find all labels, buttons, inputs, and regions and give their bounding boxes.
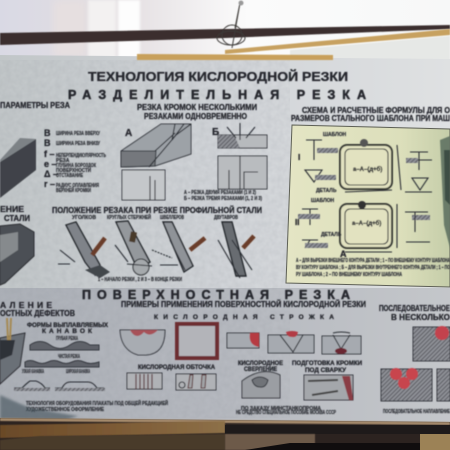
illustration: turning B: [176, 374, 216, 390]
caption: template formulas: РУ ШАБЛОНА ; 2 – ПО ВНЕШНЕМУ КОНТУРУ ШАБЛОНА: [296, 272, 402, 278]
panel: removal of surface defects: [0, 300, 168, 413]
template diagram I: [298, 132, 401, 194]
main title: ТЕХНОЛОГИЯ КИСЛОРОДНОЙ РЕЗКИ: [88, 69, 348, 84]
letter A: А: [340, 249, 347, 259]
illustration: narrow groove: УЗКАЯ КАНАВКА: [22, 369, 44, 375]
heading: fragment: ЕНИЕ: [0, 204, 24, 214]
heading: oxygen turning: КИСЛОРОДНАЯ ОБТОЧКА: [138, 364, 215, 371]
template diagram II: II: [295, 218, 299, 227]
panel: profile steel torch left: [0, 204, 34, 285]
template diagram I: ШАБЛОН: [323, 132, 347, 138]
panel: torch position for profile steel: [52, 204, 262, 283]
template diagram II: [295, 198, 397, 252]
panel: cut parameters: [0, 100, 106, 198]
background: window and wall: [0, 0, 450, 60]
parameter list: ШИРИНА РЕЗА ВНИЗУ: [56, 141, 101, 147]
parameter list: ГЛУБИНА БОРОЗДОК: [56, 163, 97, 169]
diagram B: Б: [212, 127, 219, 138]
panel: removal of surface defects: ОСТНЫХ ДЕФЕКТОВ: [0, 308, 75, 318]
labels: УГОЛКОВ: [72, 215, 96, 221]
poster sheet behind: [290, 36, 450, 60]
panel: surface cutting examples: НЕ СРЕДСТВО СПЕЦИАЛЬНОЕ ПОСОБИЕ МОСКВА СССР: [236, 410, 336, 416]
parameter list: f –: [44, 149, 55, 159]
panel: template scheme and formulas: [286, 105, 450, 287]
parameter list: [44, 128, 106, 194]
panel: removal of surface defects: ХУДОЖЕСТВЕННОЕ ОФОРМЛЕНИЕ: [26, 407, 105, 413]
illustration: channel: [163, 222, 193, 272]
template diagram II: а–А–(д+б): [352, 220, 381, 227]
heading: edge cutting: РЕЗКА КРОМОК НЕСКОЛЬКИМИ: [137, 102, 257, 112]
diagram A: block: А: [125, 128, 132, 139]
panel: removal of surface defects: КАНАВОК: [42, 328, 92, 335]
panel: edge cutting with several torches: РЕЗАКАМИ ОДНОВРЕМЕННО: [144, 111, 247, 121]
parameter list: РЕЗА: [56, 158, 70, 164]
wire hook: [217, 0, 245, 48]
panel: sequential weld beads: [379, 303, 450, 415]
heading: defect removal: АЛЕНИЕ: [0, 300, 52, 310]
panel: profile steel torch left: СТАЛИ: [4, 213, 30, 223]
heading: groove shapes: ФОРМЫ ВЫПЛАВЛЯЕМЫХ: [27, 322, 109, 329]
heading: cut parameters: ПАРАМЕТРЫ РЕЗА: [0, 100, 70, 110]
parameter list: r –: [44, 179, 55, 189]
imprint left: ТЕХНОЛОГИЯ ОБОРУДОВАНИЯ ПЛАКАТЫ ПОД ОБЩЕЙ РЕДАКЦИЕЙ: [26, 399, 168, 407]
panel: torch position for profile steel: ШВЕЛЛЕРОВ: [160, 215, 184, 221]
heading: edge preparation: ПОДГОТОВКА КРОМКИ: [292, 360, 362, 367]
illustration: V notch top: [268, 335, 314, 353]
panel background: [286, 125, 450, 287]
dark stain bottom-left: [0, 395, 78, 422]
heading: oxygen drilling: КИСЛОРОДНОЕ: [238, 360, 284, 367]
illustration: frame: [177, 324, 217, 358]
section heading: cutting: РАЗДЕЛИТЕЛЬНАЯ РЕЗКА: [68, 88, 366, 102]
heading: gouging: КИСЛОРОДНАЯ СТРОЖКА: [154, 314, 334, 321]
illustration: steel beam: [0, 224, 34, 285]
illustration: next block: [437, 369, 450, 401]
illustration: notch right: [227, 333, 259, 348]
template diagram I: ДЕТАЛЬ: [316, 188, 337, 194]
illustration: angle: [66, 222, 100, 275]
section heading: surface cutting: ПОВЕРХНОСТНАЯ РЕЗКА: [82, 288, 350, 302]
template diagram I: I: [298, 153, 300, 162]
illustration: drilling: [242, 372, 280, 398]
parameter list: ПОВЕРХНОСТИ: [56, 168, 91, 174]
bottom: torn edge and wooden table: [0, 418, 450, 450]
parameter list: е –: [44, 159, 57, 169]
panel: edge cutting with several torches: Б – РЕЗКА ТРЕМЯ РЕЗАКАМИ (1, 2 И 3): [184, 196, 262, 202]
parameter list: ВЕРХНЕЙ КРОМКИ: [56, 186, 91, 194]
panel: torch position for profile steel: ДВУТАВРОВ: [214, 215, 238, 221]
parameter list: ШИРИНА РЕЗА ВВЕРХУ: [56, 131, 101, 137]
illustration: bowl: [120, 330, 165, 355]
lower wooden slat: [137, 54, 333, 60]
template diagram II: ДЕТАЛЬ: [321, 232, 342, 238]
template diagram I: а–А–(д+б): [353, 166, 382, 173]
illustration: I-beam: [222, 222, 246, 276]
panel: edge cutting with several torches: [121, 102, 267, 202]
illustration: block with three beads: [381, 369, 432, 401]
hanging rod: [0, 25, 450, 45]
illustration: defect torch: [0, 333, 25, 384]
template diagram right side: [405, 136, 450, 248]
panel: surface cutting examples: СВЕРЛЕНИЕ: [244, 366, 278, 373]
parameter list: ОТСТАВАНИЕ: [56, 173, 84, 179]
parameter list: РАДИУС ОПЛАВЛЕНИЯ: [56, 183, 99, 189]
illustration: clean cut: ЧИСТАЯ РЕЗКА: [58, 354, 80, 360]
illustration: top block: [413, 327, 450, 361]
heading: torch position: ПОЛОЖЕНИЕ РЕЗАКА ПРИ РЕЗКЕ ПРОФИЛЬНОЙ СТАЛИ: [52, 204, 262, 215]
panel: surface cutting examples: ПОД СВАРКУ: [305, 367, 347, 374]
illustration: round bar: [116, 221, 150, 270]
illustration: edge prep: [304, 375, 353, 400]
caption: template formulas: [296, 258, 450, 278]
upper wooden slat: [225, 29, 450, 54]
illustration: rough cut: ГРУБАЯ РЕЗКА: [56, 336, 78, 342]
parameter list: НЕПЕРПЕНДИКУЛЯРНОСТЬ: [56, 153, 106, 159]
caption: A and B: А – РЕЗКА ДВУМЯ РЕЗАКАМИ (1 И 2): [184, 190, 256, 196]
diagram A: section: [122, 170, 165, 200]
panel: torch position for profile steel: КРУГЛЫХ СТЕРЖНЕЙ: [107, 213, 151, 221]
illustration: steel block: [0, 139, 36, 198]
illustration: turning A: [127, 373, 162, 389]
illustration: V notch bottom: [322, 336, 361, 354]
template diagram II: ШАБЛОН: [311, 198, 335, 204]
caption: cut notation: 1 – НАЧАЛО РЕЗКИ , 2 И 3 – В КОНЦЕ РЕЗКИ: [98, 277, 182, 283]
parameter list: В: [44, 128, 51, 138]
parameter list: В: [44, 138, 51, 148]
parameter list: Δ –: [44, 169, 58, 179]
panel: removal of surface defects: ШИРОКАЯ КАНАВКА: [66, 369, 90, 375]
heading: examples: ПРИМЕРЫ ПРИМЕНЕНИЯ ПОВЕРХНОСТНОЙ КИСЛОРОДНОЙ РЕЗКИ: [121, 298, 366, 309]
imprint right: ПО ЗАКАЗУ МИНСТАНКОПРОМА: [241, 406, 321, 412]
panel: surface cutting examples: [120, 298, 366, 416]
heading: scheme: [291, 105, 450, 123]
paper mottling: [0, 60, 290, 418]
